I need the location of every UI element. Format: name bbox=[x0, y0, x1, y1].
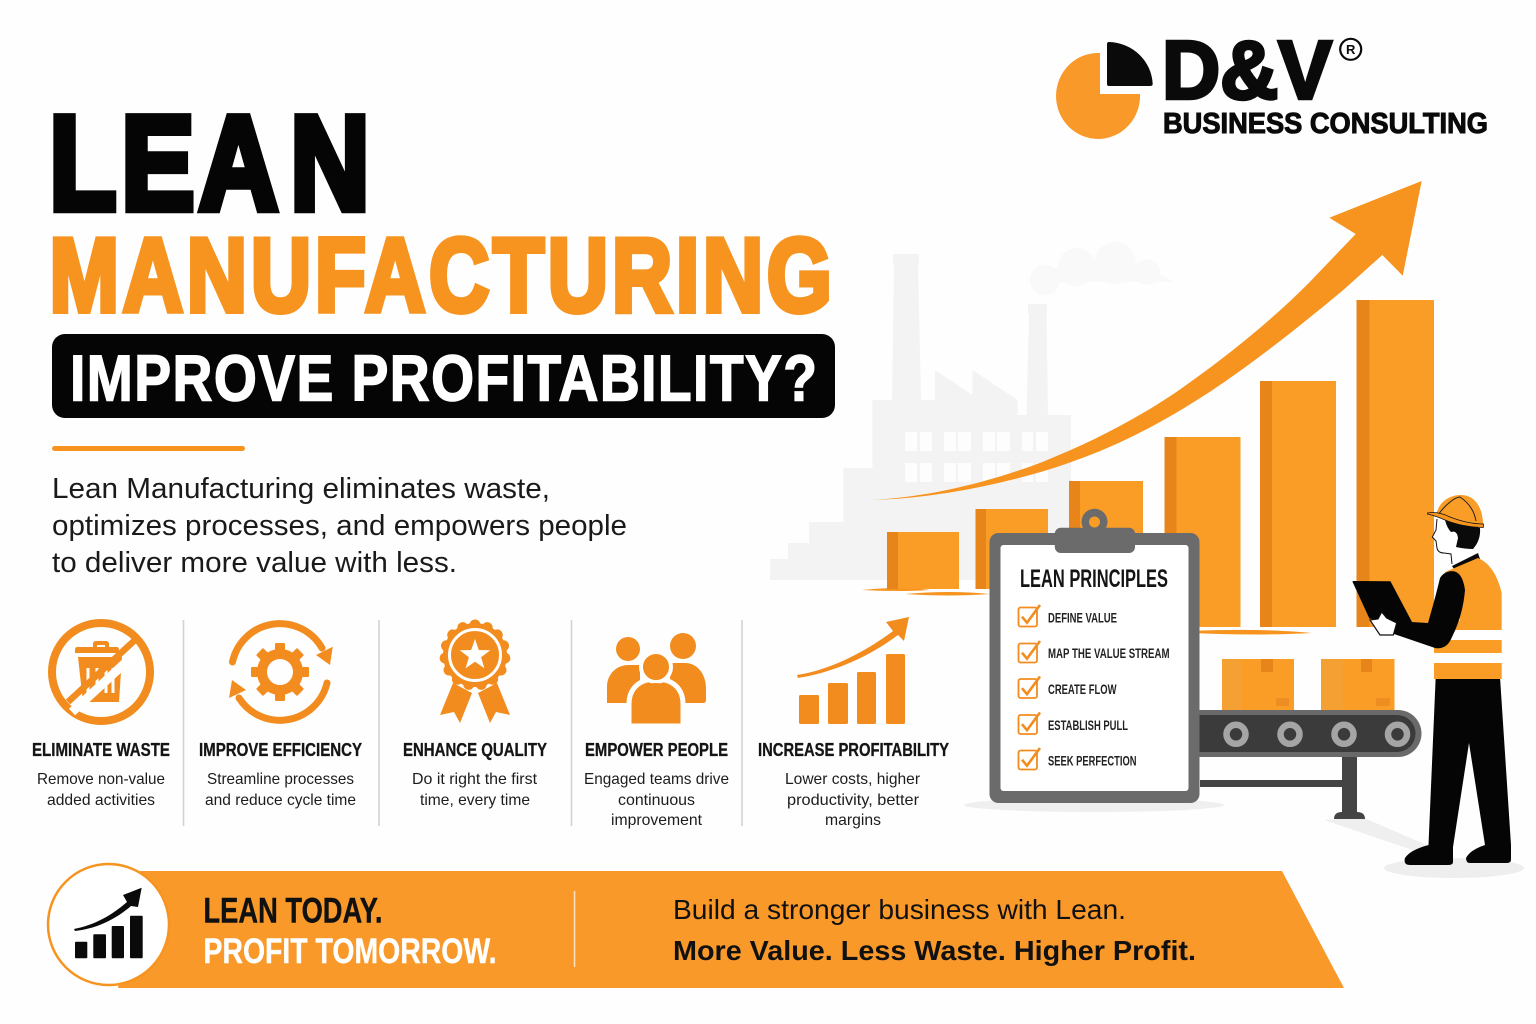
description: improvement bbox=[611, 812, 703, 829]
checklist item: create flow bbox=[1018, 676, 1117, 698]
checklist item: establish pull bbox=[1018, 712, 1128, 734]
clipboard heading: LEAN PRINCIPLES bbox=[1020, 565, 1168, 593]
panel: eliminate waste bbox=[32, 623, 170, 809]
clipboard board bbox=[990, 509, 1200, 803]
description: Engaged teams drive bbox=[584, 771, 729, 788]
collar bbox=[1452, 553, 1480, 572]
message bbox=[673, 894, 1196, 966]
safety vest bbox=[1434, 558, 1502, 679]
head and face bbox=[1432, 519, 1480, 564]
accent rule bbox=[52, 446, 245, 451]
description bbox=[412, 771, 538, 809]
tablet bbox=[1353, 582, 1412, 623]
message: More Value. Less Waste. Higher Profit. bbox=[673, 935, 1196, 966]
checklist item: establish pull: ESTABLISH PULL bbox=[1048, 718, 1128, 733]
icon: award ribbon bbox=[439, 620, 511, 723]
column dividers bbox=[184, 620, 742, 826]
heading: IMPROVE EFFICIENCY bbox=[199, 740, 362, 760]
description: margins bbox=[825, 812, 881, 829]
clipboard: lean principles bbox=[990, 509, 1200, 803]
hand bbox=[1370, 612, 1397, 635]
checklist item: seek perfection bbox=[1018, 748, 1136, 770]
description: Do it right the first bbox=[412, 771, 538, 788]
icon: gear cycle bbox=[229, 624, 333, 720]
panel: empower people bbox=[584, 633, 729, 829]
wordmark: D&V bbox=[1162, 24, 1332, 116]
registered mark: R bbox=[1346, 42, 1356, 57]
intro paragraph: Lean Manufacturing eliminates waste, bbox=[52, 473, 550, 505]
checklist item: define value: DEFINE VALUE bbox=[1048, 610, 1117, 626]
worker illustration bbox=[1353, 495, 1524, 878]
description bbox=[205, 771, 356, 809]
description: Streamline processes bbox=[207, 771, 354, 788]
description: Lower costs, higher bbox=[785, 771, 921, 788]
description: productivity, better bbox=[787, 792, 920, 809]
heading: ENHANCE QUALITY bbox=[403, 740, 547, 760]
boxes on conveyor bbox=[1222, 659, 1394, 710]
panel: increase profitability bbox=[758, 617, 949, 829]
shadow under worker and conveyor bbox=[1324, 817, 1440, 856]
factory silhouette background bbox=[770, 242, 1173, 580]
tagline: BUSINESS CONSULTING bbox=[1163, 108, 1488, 140]
slogan: PROFIT TOMORROW. bbox=[204, 931, 496, 971]
description: time, every time bbox=[420, 792, 530, 809]
hard hat bbox=[1428, 495, 1484, 528]
description bbox=[37, 771, 165, 809]
intro paragraph: optimizes processes, and empowers people bbox=[52, 510, 627, 542]
banner divider bbox=[574, 891, 575, 967]
shadow under clipboard bbox=[964, 798, 1224, 812]
conveyor belt bbox=[1199, 710, 1422, 819]
message: Build a stronger business with Lean. bbox=[673, 894, 1126, 925]
intro paragraph: to deliver more value with less. bbox=[52, 547, 457, 579]
bottom banner bbox=[48, 864, 1344, 988]
checklist item: create flow: CREATE FLOW bbox=[1048, 682, 1117, 697]
title: LEAN: LEAN bbox=[49, 88, 370, 238]
intro paragraph bbox=[52, 473, 627, 579]
title banner: improve profitability: IMPROVE PROFITABILITY? bbox=[70, 341, 817, 414]
icon: growth chart bbox=[797, 617, 909, 724]
checklist item: define value bbox=[1018, 605, 1117, 626]
panel: enhance quality bbox=[403, 620, 547, 809]
registered mark bbox=[1340, 39, 1361, 60]
heading: EMPOWER PEOPLE bbox=[585, 740, 728, 760]
description: and reduce cycle time bbox=[205, 792, 356, 809]
slogan: LEAN TODAY. bbox=[204, 890, 382, 930]
description bbox=[785, 771, 921, 829]
panel: improve efficiency bbox=[199, 624, 362, 809]
slogan bbox=[204, 890, 496, 971]
arrow: rising trend bbox=[872, 181, 1422, 500]
checklist item: map the value stream: MAP THE VALUE STREAM bbox=[1048, 646, 1170, 661]
description: Remove non-value bbox=[37, 771, 165, 788]
icon: no trash bbox=[52, 623, 150, 721]
icon: team bbox=[607, 633, 706, 726]
badge: growth icon bbox=[48, 864, 169, 985]
checklist item: seek perfection: SEEK PERFECTION bbox=[1048, 754, 1136, 768]
description: added activities bbox=[47, 792, 155, 809]
banner band bbox=[118, 871, 1344, 988]
ground shadow bbox=[1384, 858, 1524, 878]
arm bbox=[1394, 571, 1465, 648]
bar chart: growth bars bbox=[862, 300, 1434, 634]
checklist item: map the value stream bbox=[1018, 641, 1170, 662]
logo: D&V Business Consulting bbox=[1056, 24, 1488, 140]
heading: INCREASE PROFITABILITY bbox=[758, 740, 949, 760]
title: MANUFACTURING: MANUFACTURING bbox=[50, 217, 832, 333]
description bbox=[584, 771, 729, 829]
heading: ELIMINATE WASTE bbox=[32, 740, 170, 760]
trousers and shoes bbox=[1405, 677, 1511, 865]
icon: pie chart bbox=[1056, 42, 1153, 139]
description: continuous bbox=[618, 792, 695, 809]
